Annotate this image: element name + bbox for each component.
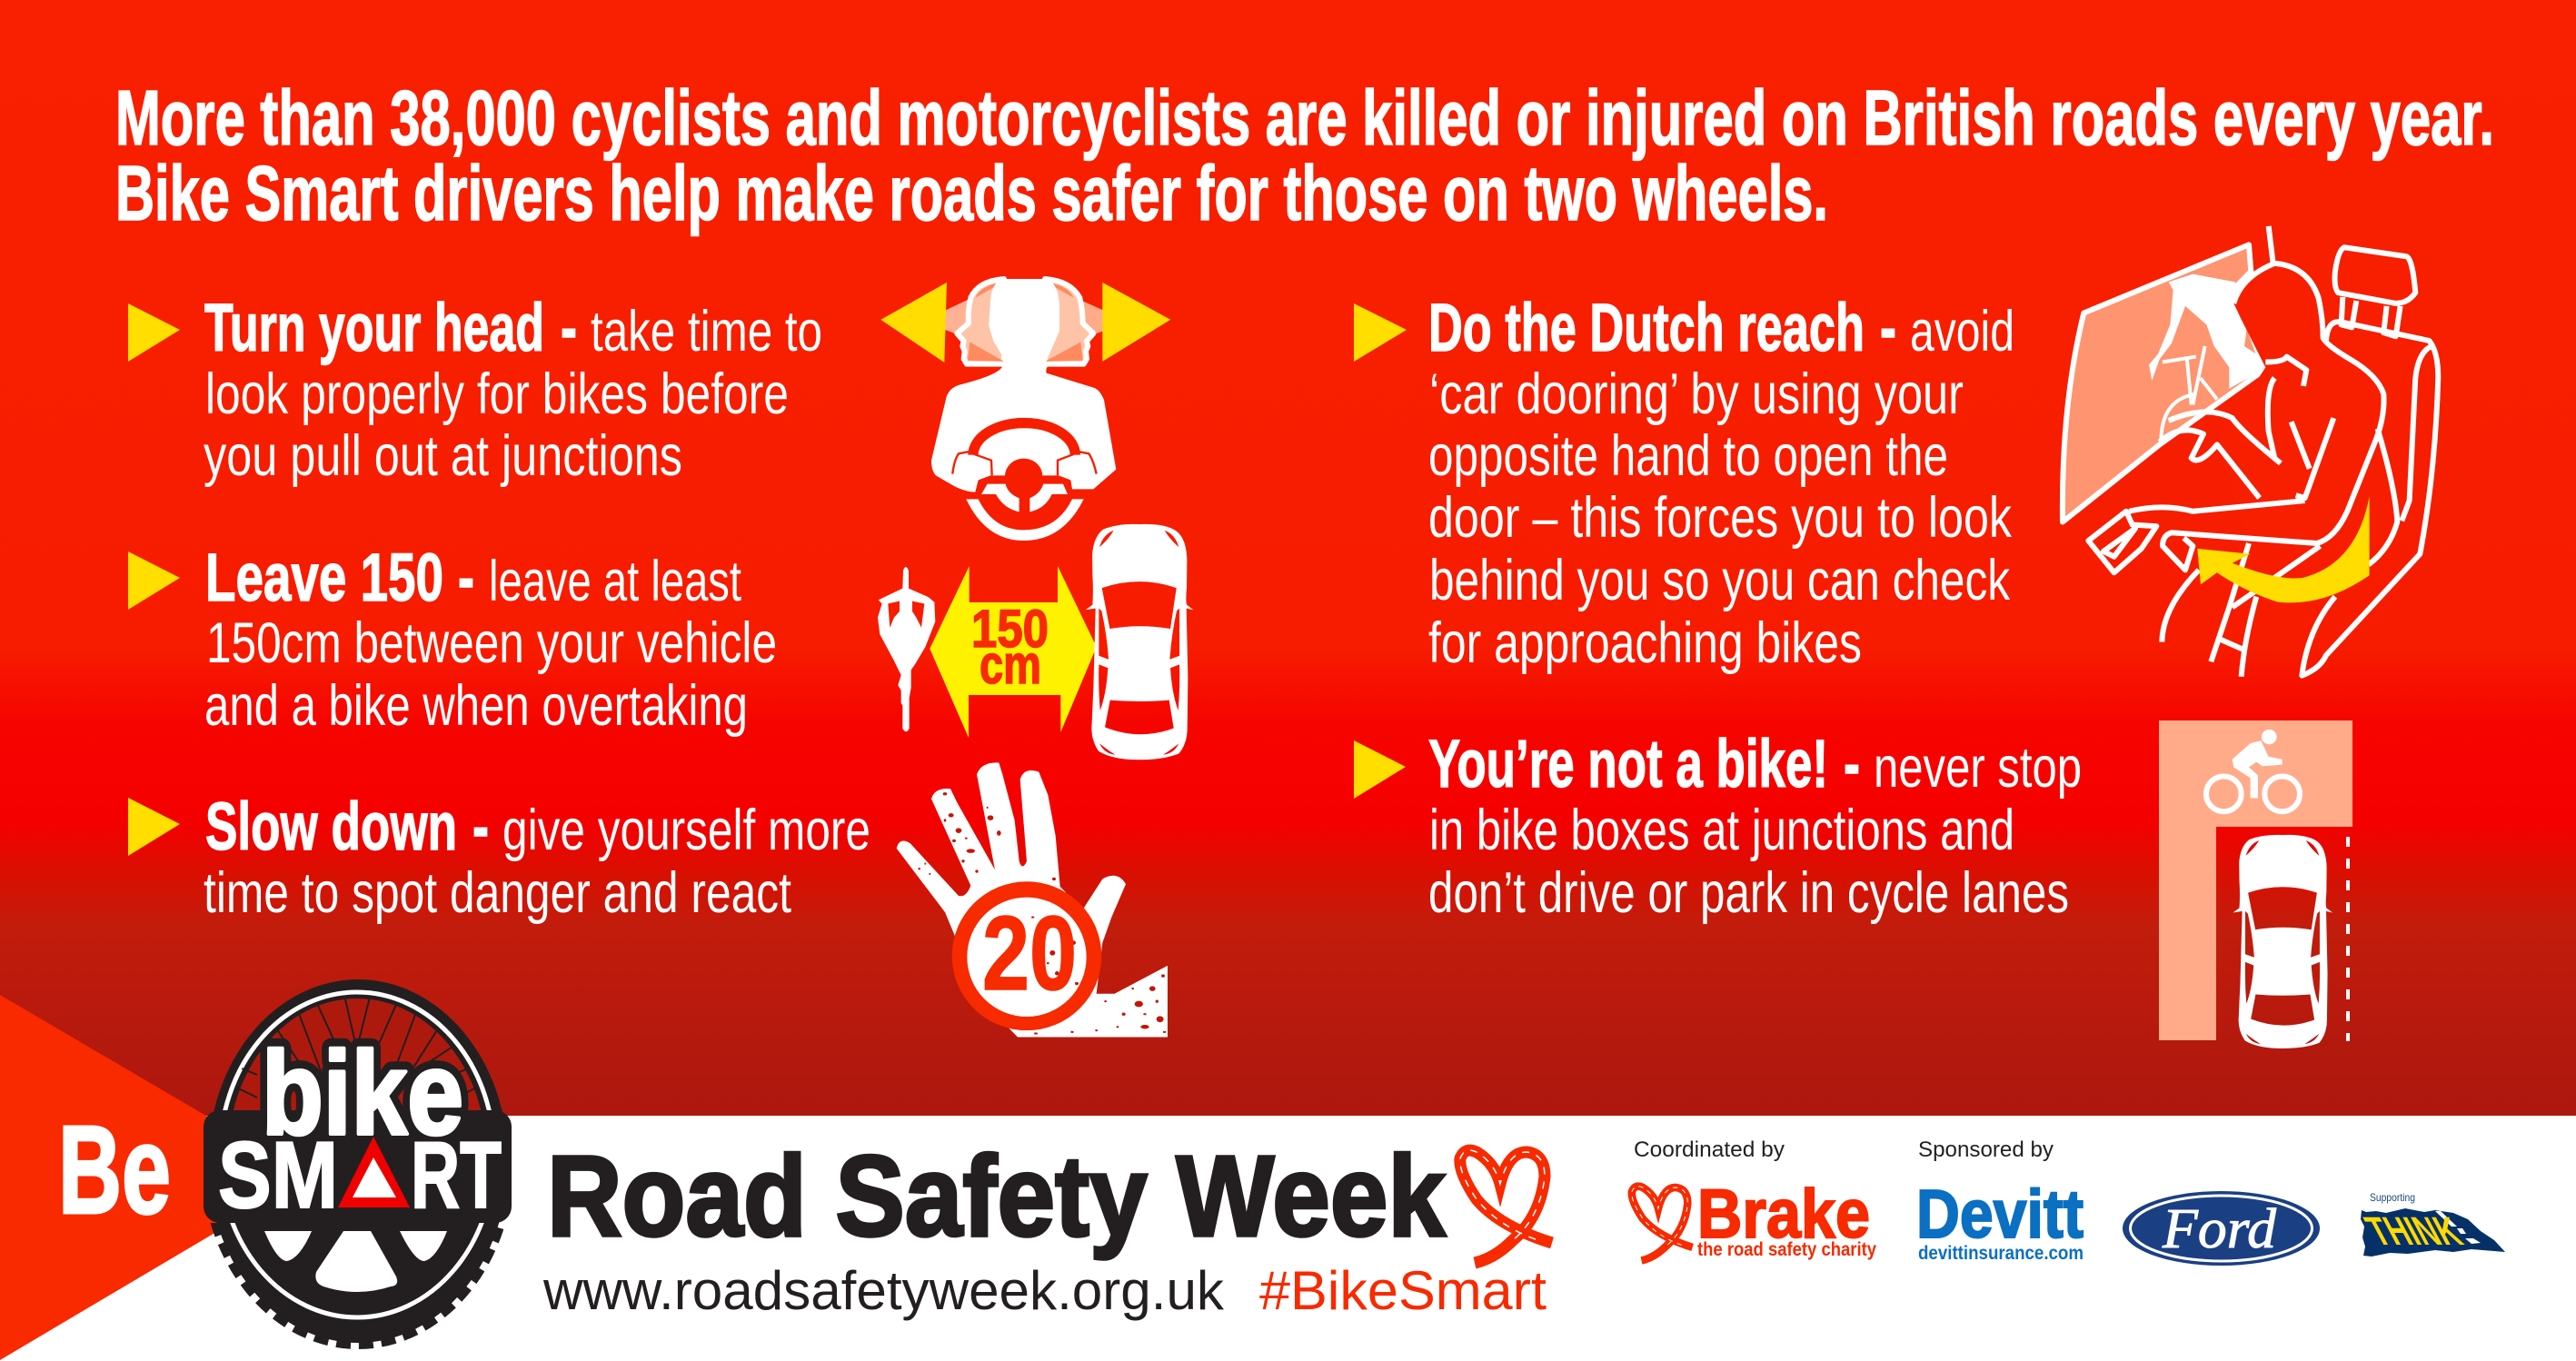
lower wheel windows <box>264 1231 447 1292</box>
icon: hand with 20 sign <box>897 762 1168 1037</box>
tip: Dutch reach <box>1354 290 2014 675</box>
tip: turn your head <box>128 290 822 488</box>
bike wordmark: bike <box>262 1027 463 1159</box>
bullet arrow <box>128 551 180 610</box>
tip text: - <box>458 540 474 615</box>
tip text <box>204 540 777 738</box>
speed limit number: 20 <box>982 894 1077 1012</box>
THINK logo: Supporting <box>2370 1191 2415 1204</box>
tip text: for approaching bikes <box>1428 611 1862 675</box>
tip text <box>204 290 822 488</box>
icon: cyclist from above <box>878 567 935 731</box>
Brake logo: Brake <box>1697 1176 1870 1253</box>
Devitt logo: Devitt <box>1916 1176 2084 1252</box>
driver head and torso <box>2217 263 2384 543</box>
tip text: ‘car dooring’ by using your <box>1429 363 1964 426</box>
bullet arrow <box>128 798 180 856</box>
website address: www.roadsafetyweek.org.uk <box>542 1260 1225 1321</box>
bullet arrow <box>1354 303 1407 362</box>
icon: car top view <box>1086 524 1193 760</box>
Ford logo: Ford <box>2162 1198 2277 1260</box>
tip text: - <box>1844 726 1860 801</box>
icon: driver turning head <box>880 279 1170 541</box>
tip text: never stop <box>1874 736 2082 800</box>
tip text: look properly for bikes before <box>205 363 789 426</box>
icon: car in bike lane <box>2233 835 2332 1048</box>
tip text: - <box>561 290 577 365</box>
tip text: leave at least <box>489 550 741 613</box>
tip text: Leave 150 <box>205 540 443 615</box>
tip text: you pull out at junctions <box>204 424 682 488</box>
THINK logo <box>2358 1191 2505 1257</box>
tip text: You’re not a bike! <box>1428 726 1828 801</box>
bullet arrow <box>128 303 180 362</box>
arms <box>2129 357 2333 512</box>
tip text <box>1428 726 2082 925</box>
bullet arrow <box>1354 740 1406 799</box>
tip text: Do the Dutch reach <box>1428 290 1865 365</box>
tip text: door – this forces you to look <box>1428 486 2012 550</box>
cyclist in window <box>2149 274 2264 389</box>
tip text: Slow down <box>205 789 457 864</box>
tip text: don’t drive or park in cycle lanes <box>1428 861 2069 925</box>
tip: leave 150 <box>128 540 777 738</box>
tip text: Turn your head <box>204 290 544 365</box>
rim <box>220 992 494 1317</box>
bike smart wheel logo <box>204 977 512 1346</box>
tip: slow down <box>128 789 870 925</box>
SMART wordmark: A <box>363 1172 383 1202</box>
SMART wordmark: RT <box>411 1123 502 1228</box>
icon: 150cm double arrow: 150 <box>971 600 1049 659</box>
Road Safety Week title: Road Safety Week <box>547 1132 1447 1260</box>
tip text: - <box>1880 290 1896 365</box>
coordinated by label: Coordinated by <box>1634 1137 1785 1162</box>
tip text: - <box>472 789 489 864</box>
Ford logo <box>2123 1191 2320 1266</box>
icon: 150cm double arrow <box>930 566 1097 738</box>
head with look-left and look-right profiles <box>880 279 1170 377</box>
tip: not a bike <box>1354 726 2082 925</box>
tip text <box>204 789 870 925</box>
tip text: time to spot danger and react <box>204 861 791 925</box>
sponsored by label: Sponsored by <box>1918 1137 2054 1162</box>
cycle lane dashed line <box>2346 837 2350 1041</box>
red corner triangle <box>0 995 310 1360</box>
tip text: 150cm between your vehicle <box>206 611 777 675</box>
SMART wordmark: SM <box>218 1123 338 1228</box>
tip text: and a bike when overtaking <box>204 674 748 738</box>
SMART wordmark <box>218 1123 502 1228</box>
spokes <box>235 999 477 1098</box>
tip text: opposite hand to open the <box>1428 424 1948 488</box>
icon: cycle symbol <box>2206 730 2300 811</box>
tyre <box>208 979 508 1343</box>
hashtag: #BikeSmart <box>1259 1260 1547 1321</box>
tip text: give yourself more <box>502 799 870 862</box>
Brake logo: the road safety charity <box>1697 1239 1876 1260</box>
tip text: behind you so you can check <box>1429 549 2010 612</box>
shoulders, steering wheel and hands <box>931 363 1116 541</box>
headrest <box>2335 247 2415 303</box>
tip text: in bike boxes at junctions and <box>1429 799 2014 862</box>
Be label: Be <box>58 1100 171 1240</box>
door handle hand <box>2088 512 2156 572</box>
tip text: take time to <box>591 300 822 363</box>
tip text <box>1428 290 2014 675</box>
Brake logo <box>1632 1176 1876 1260</box>
legs <box>2162 543 2320 677</box>
bike wordmark weight layer: bike <box>262 1027 463 1159</box>
headline <box>115 75 2494 237</box>
curved yellow arrow <box>2197 496 2370 602</box>
headline: Bike Smart drivers help make roads safer for those on two wheels. <box>115 151 1828 237</box>
Devitt logo: devittinsurance.com <box>1918 1243 2084 1264</box>
icon: 150cm double arrow: cm <box>980 634 1041 695</box>
icon: Dutch reach driver <box>2063 226 2438 677</box>
tip text: avoid <box>1910 300 2014 363</box>
footer white band <box>0 1116 2576 1361</box>
icon: road heart <box>1460 1150 1552 1263</box>
car window <box>2063 244 2264 522</box>
icon: bike box L-shape <box>2159 720 2352 1040</box>
hub band <box>204 1110 512 1223</box>
THINK logo: THINK <box>2358 1208 2470 1253</box>
seat <box>2302 322 2438 676</box>
